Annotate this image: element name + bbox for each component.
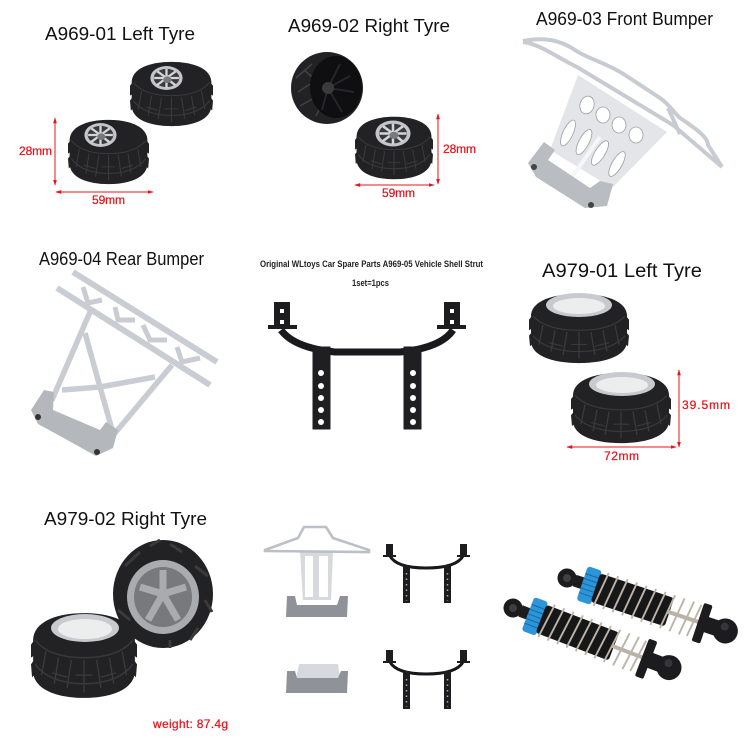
dimension: 39.5mm height: 39.5mm <box>682 398 730 412</box>
icon: shell strut <box>268 302 466 429</box>
heading: A979-01 Left Tyre: A979-01 Left Tyre <box>542 261 702 282</box>
icon: mini shell strut lower <box>383 650 470 709</box>
panel: A969-04 rear bumper <box>31 249 217 456</box>
panel: A969-02 right tyre <box>288 16 476 200</box>
panel: A969-03 front bumper <box>523 9 722 208</box>
icon: rear shock absorber <box>552 556 744 654</box>
heading: A979-02 Right Tyre: A979-02 Right Tyre <box>44 509 207 529</box>
icon: lower monster tyre <box>571 372 671 443</box>
heading: A969-02 Right Tyre: A969-02 Right Tyre <box>288 16 450 36</box>
icon: front right tyre <box>355 117 433 179</box>
dimension: 28mm height <box>19 118 55 185</box>
dimension: 28mm height: 28mm <box>19 144 52 158</box>
heading: A969-01 Left Tyre: A969-01 Left Tyre <box>45 24 195 44</box>
dimension: 59mm width: 59mm <box>382 186 415 200</box>
icon: mini shell strut upper <box>383 544 470 603</box>
icon: front tyre with silver rim <box>31 613 137 698</box>
dimension: 59mm width <box>355 185 434 200</box>
panel: A969-01 left tyre <box>19 24 213 207</box>
panel: A979-02 right tyre <box>31 509 228 731</box>
dimension: 28mm height: 28mm <box>443 142 476 156</box>
icon: front bumper <box>523 39 722 208</box>
icon: mini front bumper <box>265 527 369 617</box>
dimension: 39.5mm height <box>679 370 730 447</box>
dimension: 72mm width <box>567 447 676 463</box>
heading: A969-04 Rear Bumper: A969-04 Rear Bumper <box>39 249 204 269</box>
panel: A969-05 vehicle shell strut <box>260 259 483 429</box>
icon: front shock absorber <box>497 586 688 691</box>
dimension: 28mm height <box>438 114 476 184</box>
icon: front left tyre <box>68 120 149 184</box>
panel: shock absorbers <box>497 556 744 691</box>
panel: A979-01 left tyre <box>529 261 730 463</box>
dimension: 59mm width <box>56 192 153 207</box>
icon: mini bumper mount <box>286 664 348 693</box>
heading: A969-03 Front Bumper: A969-03 Front Bumper <box>536 9 713 29</box>
icon: rear tyre with five-spoke wheel <box>113 540 213 648</box>
caption: product title: Original WLtoys Car Spare Parts A969-05 Vehicle Shell Strut <box>260 259 483 269</box>
panel: assembled parts set <box>265 527 470 709</box>
icon: rear bumper <box>31 272 217 456</box>
caption: quantity: 1set=1pcs <box>352 278 389 288</box>
annotation: weight: weight: 87.4g <box>152 717 228 731</box>
dimension: 72mm width: 72mm <box>604 449 639 463</box>
icon: tyre showing black inner wheel <box>291 52 363 124</box>
icon: upper monster tyre <box>529 293 629 363</box>
icon: rear left tyre <box>130 62 213 126</box>
dimension: 59mm width: 59mm <box>92 193 125 207</box>
